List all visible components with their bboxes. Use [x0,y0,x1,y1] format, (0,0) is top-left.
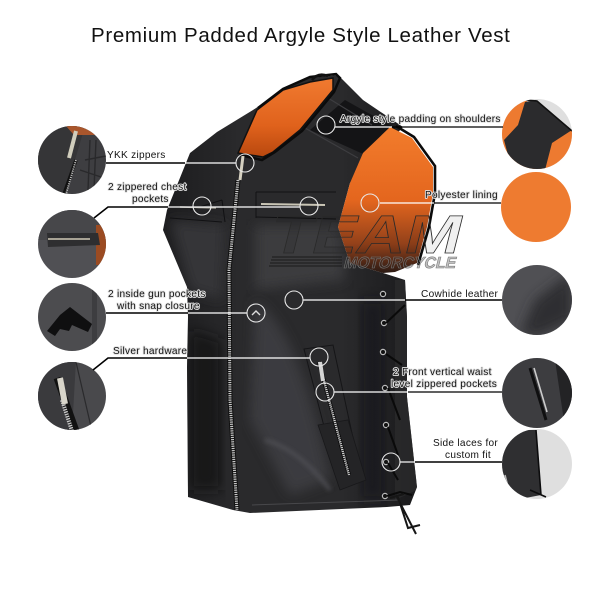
callout: chest pockets: pockets [132,194,169,205]
thumbnail: hardware [38,361,106,431]
callout: silver hardware [38,346,328,431]
callout: side laces: custom fit [445,450,491,461]
orange lining: back neck [238,78,333,157]
arm hole binding [396,126,435,265]
callout: waist pockets: 2 Front vertical waist [393,367,492,378]
main zipper [229,180,238,510]
callout: polyester lining [361,172,571,242]
vest body [163,75,417,513]
thumbnail: waist pocket [502,358,572,428]
callout: YKK zippers [38,126,254,194]
callout: gun pockets: 2 inside gun pockets [108,289,206,300]
orange lining: arm hole [338,127,433,273]
callout: side laces: Side laces for [433,438,498,449]
callout: argyle padding: Argyle style padding on shoulders [340,114,501,125]
watermark: TEAM [265,204,470,265]
chest zippers [261,204,325,205]
callout: gun pockets [38,283,265,351]
callout: gun pockets: with snap closure [116,301,200,312]
lace tassel [390,494,420,534]
thumbnail: shoulder [502,99,572,170]
callout: cowhide leather: Cowhide leather [421,289,499,300]
waist zipper [319,362,349,475]
callout: chest pockets [38,182,318,278]
vest illustration [163,74,435,534]
thumbnail: side laces [502,429,572,499]
thumbnail: lining [501,172,571,242]
callout: YKK zippers: YKK zippers [107,150,166,161]
eyelets and laces [380,291,389,499]
title: Premium Padded Argyle Style Leather Vest [91,24,511,47]
callout: side laces [382,429,572,499]
callout: chest pockets: 2 zippered chest [108,182,187,193]
callout: waist pockets [316,358,572,428]
icon: pistol [47,307,92,336]
thumbnail: zipper [38,126,106,194]
thumbnail: leather [502,265,572,335]
callout: polyester lining: Polyester lining [425,190,498,201]
thumbnail: chest pocket [38,210,106,278]
callout: argyle padding [317,99,572,170]
callout: waist pockets: level zippered pockets [391,379,497,390]
collar binding [240,74,340,160]
callout: cowhide leather [285,265,572,335]
callout: silver hardware: Silver hardware [113,346,187,357]
watermark: MOTORCYCLE [342,254,459,272]
thumbnail: gun pocket [38,283,106,351]
